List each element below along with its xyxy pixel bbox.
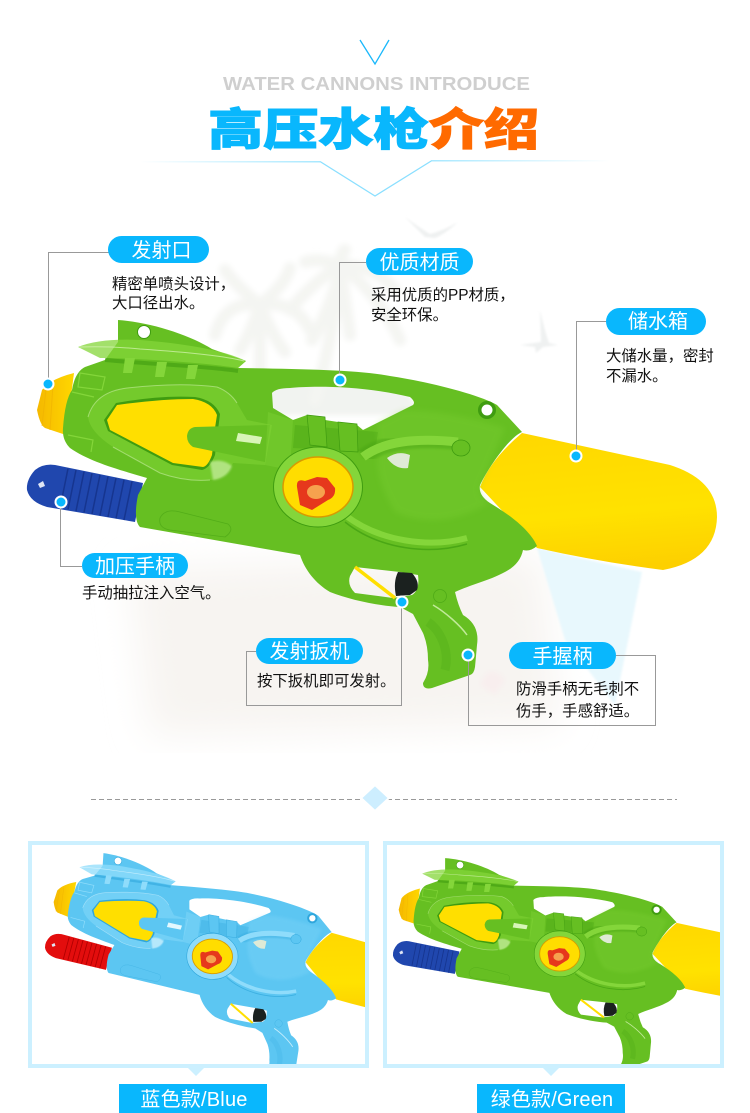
callout: grip xyxy=(462,642,656,726)
panel: blue variant: 蓝色款/Blue xyxy=(140,1088,248,1111)
panel: blue variant xyxy=(28,841,369,1113)
label xyxy=(477,1084,625,1113)
background scene: palms, birds and pale beach xyxy=(130,217,642,735)
panel: green variant xyxy=(385,843,750,1113)
callout: material: 采用优质的PP材质， xyxy=(371,286,515,304)
callout: water tank xyxy=(570,308,714,462)
callout: grip: 伤手，手感舒适。 xyxy=(516,702,639,720)
main water gun illustration xyxy=(27,320,717,688)
callout: water tank: 储水箱 xyxy=(628,310,688,333)
main heading: 高压水枪介绍 xyxy=(208,105,539,155)
panel: green variant: 绿色款/Green xyxy=(491,1088,613,1111)
callout: muzzle xyxy=(42,236,235,390)
callout: trigger: 发射扳机 xyxy=(270,640,350,663)
callout: muzzle: 精密单喷头设计， xyxy=(112,275,235,293)
callout: trigger xyxy=(246,596,408,706)
frame xyxy=(385,843,722,1066)
icon: top chevron xyxy=(360,40,389,64)
label xyxy=(119,1084,267,1113)
heading underline with arrow xyxy=(140,160,610,196)
title block xyxy=(140,40,610,196)
callout: pump handle xyxy=(54,496,221,602)
callout: muzzle: 大口径出水。 xyxy=(112,294,204,312)
section divider with diamond xyxy=(91,785,677,811)
green water gun xyxy=(393,858,720,1064)
callout: water tank: 大储水量，密封 xyxy=(606,347,714,365)
callout: water tank: 不漏水。 xyxy=(606,367,668,385)
callout: muzzle: 发射口 xyxy=(132,239,192,262)
callout: pump handle: 手动抽拉注入空气。 xyxy=(82,584,221,602)
callout: material: 安全环保。 xyxy=(371,306,448,324)
callout: grip: 防滑手柄无毛刺不 xyxy=(516,680,639,698)
callout: material: 优质材质 xyxy=(380,251,460,274)
pointer xyxy=(188,1068,204,1076)
pointer xyxy=(543,1068,559,1076)
callout: material xyxy=(334,248,515,386)
callout: trigger: 按下扳机即可发射。 xyxy=(257,671,396,690)
callout: grip: 手握柄 xyxy=(532,645,592,668)
frame xyxy=(30,843,367,1066)
blue water gun xyxy=(45,853,365,1064)
english subtitle: WATER CANNONS INTRODUCE xyxy=(223,74,530,94)
callout: pump handle: 加压手柄 xyxy=(95,555,175,578)
